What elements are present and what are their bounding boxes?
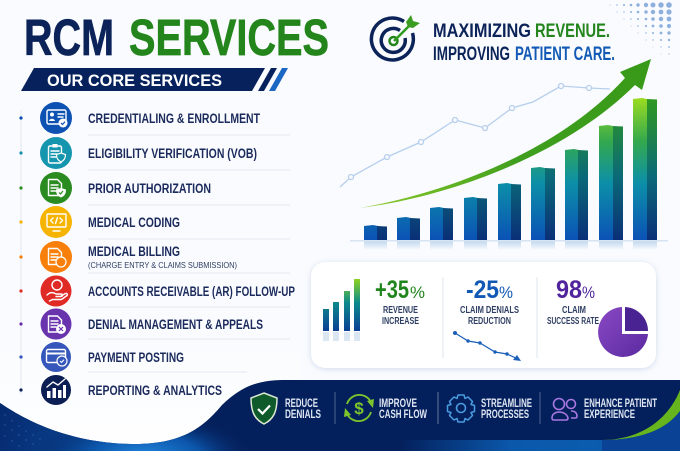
stat: revenue	[375, 276, 425, 327]
benefit: reduce denials	[251, 393, 321, 424]
item: medical billing: (CHARGE ENTRY & CLAIMS SUBMISSION)	[88, 261, 237, 270]
item: payment posting: PAYMENT POSTING	[88, 350, 184, 365]
baseline	[350, 240, 668, 242]
service list	[19, 102, 295, 405]
title: SERVICES	[129, 9, 329, 66]
stat: success rate	[547, 276, 599, 327]
item: denial management	[19, 308, 290, 340]
benefit: streamline processes: STREAMLINE	[481, 397, 532, 410]
stat: success rate: %	[582, 283, 595, 302]
item: accounts receivable	[19, 276, 295, 307]
stat: denials: REDUCTION	[468, 316, 511, 327]
stat: denials: -25	[466, 276, 499, 304]
benefit: reduce denials: REDUCE	[285, 397, 318, 410]
tagline	[433, 21, 615, 65]
icon: target with arrow	[371, 15, 420, 60]
benefit: enhance patient experience: EXPERIENCE	[584, 408, 635, 421]
benefit: streamline processes	[448, 395, 532, 422]
item: reporting	[19, 375, 222, 405]
item: credentialing: CREDENTIALING & ENROLLMENT	[88, 111, 261, 126]
benefit: reduce denials: DENIALS	[285, 408, 321, 421]
benefit: streamline processes: PROCESSES	[481, 408, 529, 421]
item: prior authorization	[19, 172, 290, 205]
stat: revenue: INCREASE	[382, 316, 419, 327]
title: RCM	[24, 9, 114, 66]
stat: denials	[453, 276, 521, 361]
tagline: IMPROVING	[433, 44, 510, 65]
stat: revenue: +35	[375, 276, 409, 304]
item: denial management: DENIAL MANAGEMENT & APPEALS	[88, 317, 263, 332]
bar chart with trend line and growth arrow	[340, 59, 668, 250]
benefit: improve cash flow: IMPROVE	[379, 397, 417, 410]
item: eligibility: ELIGIBILITY VERIFICATION (VOB)	[88, 146, 257, 161]
bar reflections	[364, 241, 657, 250]
item: medical coding: MEDICAL CODING	[88, 215, 180, 230]
stat: success rate: 98	[556, 276, 582, 304]
benefit: improve cash flow: CASH FLOW	[379, 408, 428, 421]
stat: success rate: SUCCESS RATE	[547, 316, 599, 327]
title	[24, 9, 329, 66]
bottom band	[0, 380, 680, 451]
item: medical coding	[19, 206, 290, 239]
tagline: REVENUE.	[535, 21, 610, 42]
stat: denials: %	[499, 283, 513, 302]
item: payment posting	[19, 342, 247, 372]
pie chart	[598, 307, 648, 357]
green swoosh	[602, 390, 680, 440]
item: accounts receivable: ACCOUNTS RECEIVABLE (AR) FOLLOW-UP	[88, 284, 295, 299]
item: reporting: REPORTING & ANALYTICS	[88, 383, 222, 398]
stat: denials: CLAIM DENIALS	[460, 305, 519, 316]
benefit: improve cash flow: $	[354, 399, 364, 418]
stats card	[311, 262, 656, 368]
timeline line	[20, 110, 22, 395]
bars	[364, 98, 657, 240]
item: credentialing	[19, 102, 290, 135]
item: prior authorization: PRIOR AUTHORIZATION	[88, 181, 211, 196]
benefit: enhance patient experience	[552, 397, 658, 421]
item: medical billing: MEDICAL BILLING	[88, 244, 180, 259]
section banner: our core services: OUR CORE SERVICES	[47, 72, 222, 90]
stat: success rate: CLAIM	[562, 305, 586, 316]
stat: revenue: %	[410, 283, 425, 302]
trend line	[340, 84, 610, 187]
growth arrow	[360, 59, 651, 208]
stat: mini bars	[323, 279, 360, 341]
tagline: PATIENT CARE.	[515, 44, 615, 65]
left dot texture	[4, 414, 41, 447]
stat: revenue: REVENUE	[383, 305, 418, 316]
item: eligibility	[19, 137, 290, 170]
halftone dots	[610, 2, 672, 55]
benefit: improve cash flow	[344, 395, 428, 421]
item: medical billing	[19, 241, 290, 273]
tagline: MAXIMIZING	[433, 21, 531, 42]
section banner: our core services	[21, 68, 288, 91]
